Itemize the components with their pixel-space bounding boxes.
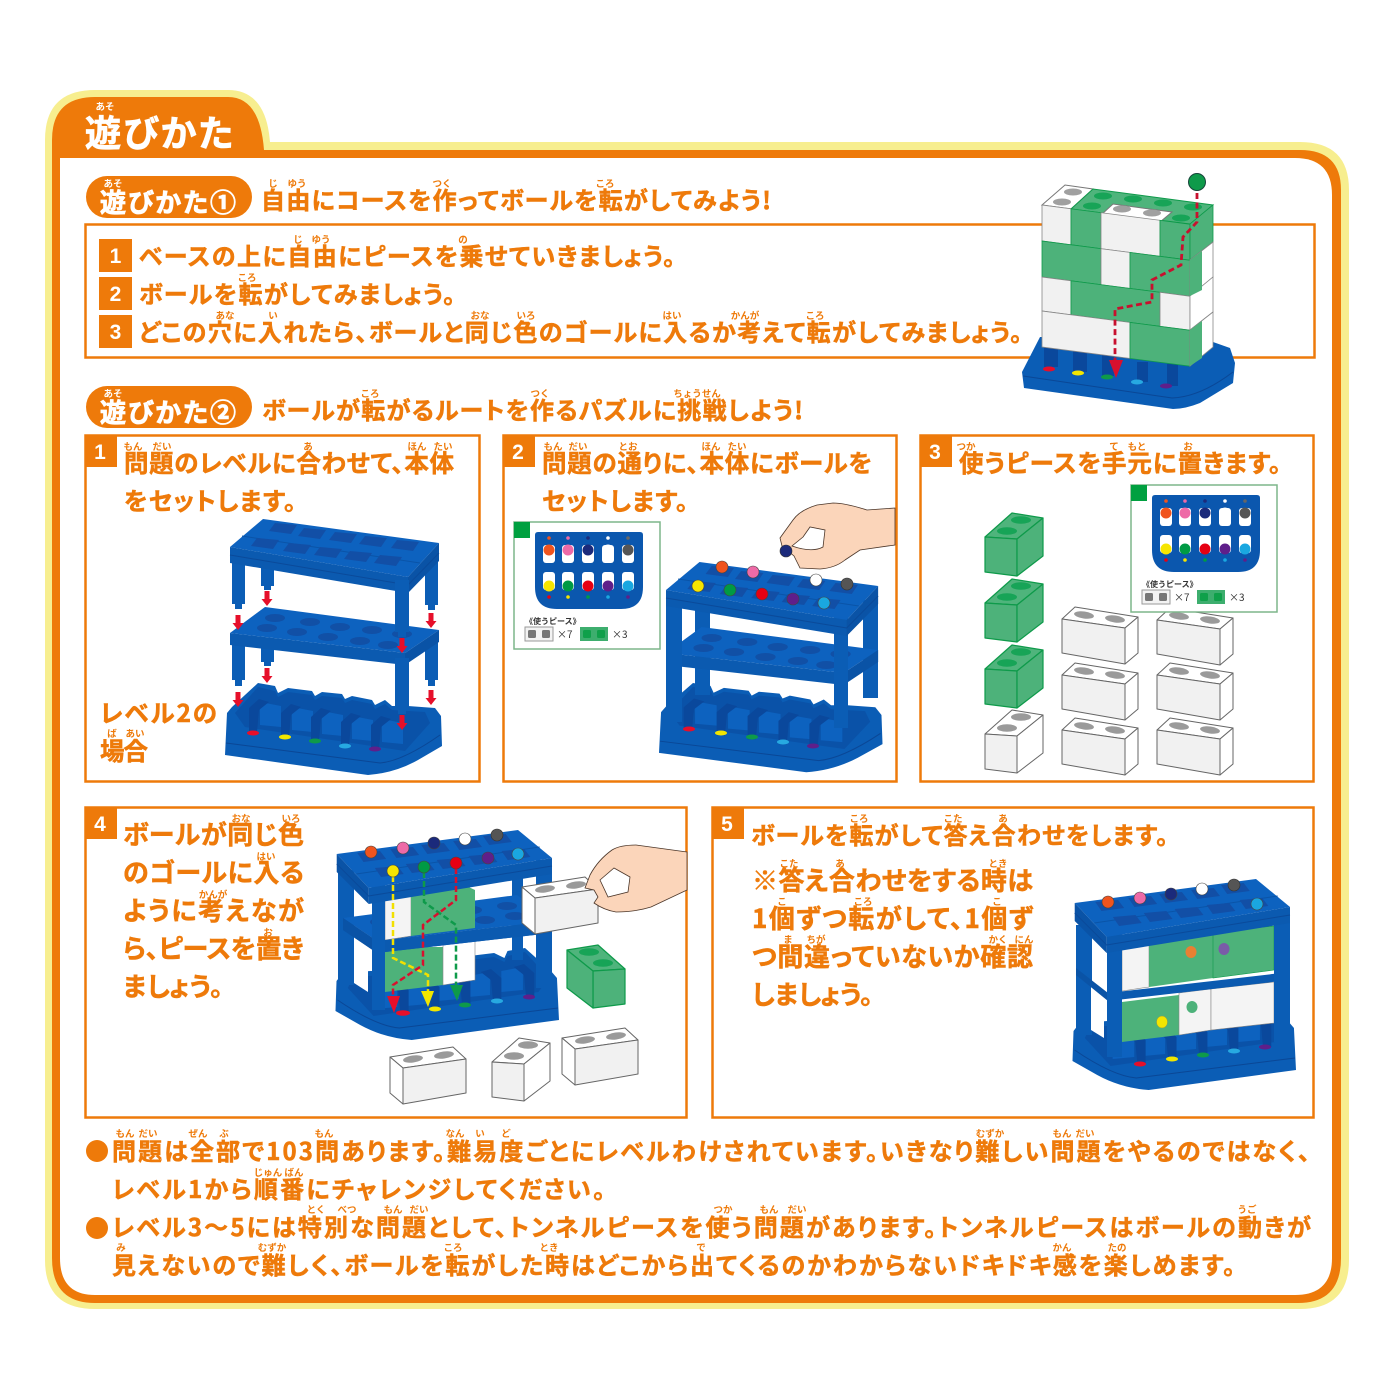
note 2: たの [1107, 1240, 1127, 1254]
problem card: ×7 [557, 626, 573, 641]
icon: hand holding piece [585, 845, 687, 912]
level 2 label: ば [107, 726, 117, 740]
step 2: 2 [110, 283, 121, 306]
step 2: ころ [237, 270, 257, 284]
panel 2 text: たい [727, 439, 747, 453]
panel 3 text: て [1109, 439, 1119, 453]
section heading: play style 1: あそ [103, 176, 123, 190]
section heading: play style 2: ころ [360, 386, 380, 400]
panel 2 text: とお [618, 439, 638, 453]
panel 5 note: ま [783, 932, 793, 946]
panel 5 note: あ [835, 856, 845, 870]
level 2 label: 場合 [100, 733, 148, 768]
problem card: 《使うピース》 [1142, 579, 1198, 590]
panel 4 text: ら、ピースを置き [123, 929, 304, 966]
problem card: ×3 [612, 626, 628, 641]
step 3: かんが [731, 308, 760, 322]
note 2: とき [539, 1240, 559, 1254]
panel 4 text: はい [256, 849, 276, 863]
panel 5 heading: ころ [849, 811, 869, 825]
panel 5 note: しましょう。 [752, 975, 873, 1012]
panel 3 text: 使うピースを手元に置きます。 [959, 445, 1281, 480]
panel 5 note: とき [988, 856, 1008, 870]
panel 5 note: かく [988, 932, 1008, 946]
panel 3 text: もと [1128, 439, 1146, 453]
panel 5: check the answer: 5 [721, 813, 733, 836]
note 1: ど [501, 1126, 511, 1140]
panel 2 text: セットします。 [542, 483, 688, 518]
step 1: ベースの上に自由にピースを乗せていきましょう。 [139, 237, 675, 272]
panel: free-play steps [86, 224, 1314, 358]
section heading: play style 1: じ [268, 176, 278, 190]
icon: hand holding ball [780, 503, 895, 569]
panel 4 text: いろ [281, 811, 301, 825]
panel 2 text [542, 439, 872, 518]
note 2 [86, 1202, 1311, 1281]
section heading: play style 2: あそ [103, 386, 123, 400]
step 3: ころ [805, 308, 825, 322]
panel 3: lay out the pieces: 3 [929, 441, 941, 464]
panel 5 note: こた [779, 856, 799, 870]
panel 4: place the pieces: 4 [94, 813, 106, 836]
section heading: play style 2: つく [530, 386, 550, 400]
note 2: ころ [443, 1240, 463, 1254]
problem card: 《使うピース》 [525, 616, 581, 627]
panel 1 text: 問題のレベルに合わせて、本体 [124, 445, 454, 480]
step 1: 1 [110, 245, 122, 268]
panel 1 text: ほん [407, 439, 427, 453]
section heading: play style 1 [86, 176, 771, 220]
panel 2 text: 問題の通りに、本体にボールを [542, 445, 872, 480]
panel 1 text: をセットします。 [124, 483, 296, 518]
step 3: はい [662, 308, 682, 322]
panel 2: set the balls [503, 435, 896, 782]
step 1: じ [293, 232, 303, 246]
panel 5 note: こ [777, 894, 787, 908]
note 2: だい [787, 1202, 807, 1216]
note 1: じゅん [254, 1165, 283, 1179]
panel 5 heading: ボールを転がして答え合わせをします。 [751, 816, 1168, 851]
level 2 label [100, 695, 217, 768]
panel 3: lay out the pieces [920, 435, 1314, 782]
step 3: い [268, 308, 278, 322]
panel 1 text: もん [123, 439, 143, 453]
panel 5 note: こ [992, 894, 1002, 908]
step 1: ゆう [311, 232, 331, 246]
panel 3 text: お [1183, 439, 1193, 453]
note 2: べつ [337, 1202, 357, 1216]
section heading: play style 2: 遊びかた② [100, 393, 236, 430]
note 1: もん [1052, 1126, 1072, 1140]
problem card: ×7 [1174, 589, 1190, 604]
panel 2 text: もん [543, 439, 563, 453]
section heading: play style 1: つく [432, 176, 452, 190]
note 2: だい [409, 1202, 429, 1216]
panel 4 text: のゴールに入る [123, 853, 304, 890]
panel 4 text [123, 811, 304, 1004]
panel 3 text: つか [956, 439, 976, 453]
title: あそ [95, 99, 115, 113]
problem card [514, 522, 660, 649]
note 1: もん [115, 1126, 135, 1140]
panel 2 text: だい [568, 439, 588, 453]
note 2: もん [759, 1202, 779, 1216]
title: 遊びかた [85, 105, 233, 157]
panel 5 note [752, 856, 1034, 1012]
panel 1: set up the frame: 1 [94, 441, 106, 464]
panel 5 note: ちが [806, 932, 826, 946]
note 1: 問題は全部で103問あります。難易度ごとにレベルわけされています。いきなり難しい問題をやるのではなく、 [112, 1132, 1310, 1167]
panel 5 heading: あ [998, 811, 1008, 825]
step 3: 3 [110, 321, 121, 344]
panel 2: set the balls: 2 [512, 441, 524, 464]
level 2 label: レベル2の [100, 695, 217, 730]
note 2: とく [307, 1202, 325, 1216]
note 1: い [475, 1126, 485, 1140]
note 1: なん [445, 1126, 465, 1140]
section heading: play style 1: ゆう [287, 176, 307, 190]
pieces [985, 513, 1233, 775]
section heading: play style 2 [86, 386, 803, 430]
rack with balls [659, 561, 883, 772]
note 1: むずか [976, 1126, 1005, 1140]
section heading: play style 2: ボールが転がるルートを作るパズルに挑戦しよう! [262, 391, 803, 426]
completed rack [1072, 879, 1296, 1090]
step 3: いろ [516, 308, 536, 322]
panel 1 text: あ [303, 439, 313, 453]
panel 4 text: ましょう。 [123, 967, 223, 1004]
panel 1 text: たい [433, 439, 453, 453]
note 2: み [116, 1240, 126, 1254]
step 2: ボールを転がしてみましょう。 [139, 275, 455, 310]
section heading: play style 1: 遊びかた① [100, 183, 236, 220]
panel 5 note: ころ [853, 894, 873, 908]
rack with routes [335, 829, 559, 1040]
step 3: おな [470, 308, 490, 322]
panel 5 note: ※答え合わせをする時は [752, 861, 1033, 898]
panel 5: check the answer [712, 807, 1314, 1118]
note 1: もん [314, 1126, 334, 1140]
note 1: だい [138, 1126, 158, 1140]
illustration: stacked block tower with red route [1022, 174, 1235, 409]
note 2: レベル3〜5には特別な問題として、トンネルピースを使う問題があります。トンネルピースはボールの動きが [112, 1208, 1311, 1243]
panel 5 note: 1個ずつ転がして、1個ず [752, 899, 1033, 936]
section heading: play style 1: 自由にコースを作ってボールを転がしてみよう! [261, 181, 771, 216]
panel 1 text [123, 439, 454, 518]
panel 5 heading: こた [943, 811, 963, 825]
note 2: 見えないので難しく、ボールを転がした時はどこから出てくるのかわからないドキドキ感を楽しめます。 [112, 1246, 1235, 1281]
step 1: の [458, 232, 468, 246]
note 1: だい [1075, 1126, 1095, 1140]
panel 2 text: ほん [701, 439, 721, 453]
problem card: ×3 [1229, 589, 1245, 604]
panel 4: place the pieces [85, 807, 687, 1118]
section heading: play style 1: ころ [595, 176, 615, 190]
note 2: うご [1237, 1202, 1257, 1216]
note 2: つか [713, 1202, 733, 1216]
panel 1: set up the frame [85, 435, 480, 782]
panel 4 text: かんが [199, 887, 228, 901]
panel 4 text: ように考えなが [123, 891, 304, 928]
panel 5 note: にん [1014, 932, 1034, 946]
section heading: play style 2: ちょうせん [673, 386, 721, 400]
problem card [1131, 485, 1277, 612]
note 1: ばん [284, 1165, 304, 1179]
note 2: もん [383, 1202, 403, 1216]
note 1: ぜん [188, 1126, 208, 1140]
level 2 label: あい [125, 726, 145, 740]
note 2: むずか [258, 1240, 287, 1254]
panel 4 text: おな [231, 811, 251, 825]
step 3: あな [215, 308, 235, 322]
note 2: で [696, 1240, 706, 1254]
note 1 [86, 1126, 1310, 1205]
note 2: かん [1052, 1240, 1072, 1254]
bottom notes [86, 1126, 1311, 1281]
step 3: どこの穴に入れたら、ボールと同じ色のゴールに入るか考えて転がしてみましょう。 [139, 313, 1022, 348]
panel 4 text: ボールが同じ色 [123, 815, 304, 852]
panel 1 text: だい [152, 439, 172, 453]
note 1: ぶ [219, 1126, 229, 1140]
exploded rack illustration [225, 519, 442, 775]
panel 5 note: つ間違っていないか確認 [752, 937, 1033, 974]
loose pieces [390, 877, 638, 1104]
panel 4 text: お [263, 925, 273, 939]
note 1: レベル1から順番にチャレンジしてください。 [112, 1170, 605, 1205]
